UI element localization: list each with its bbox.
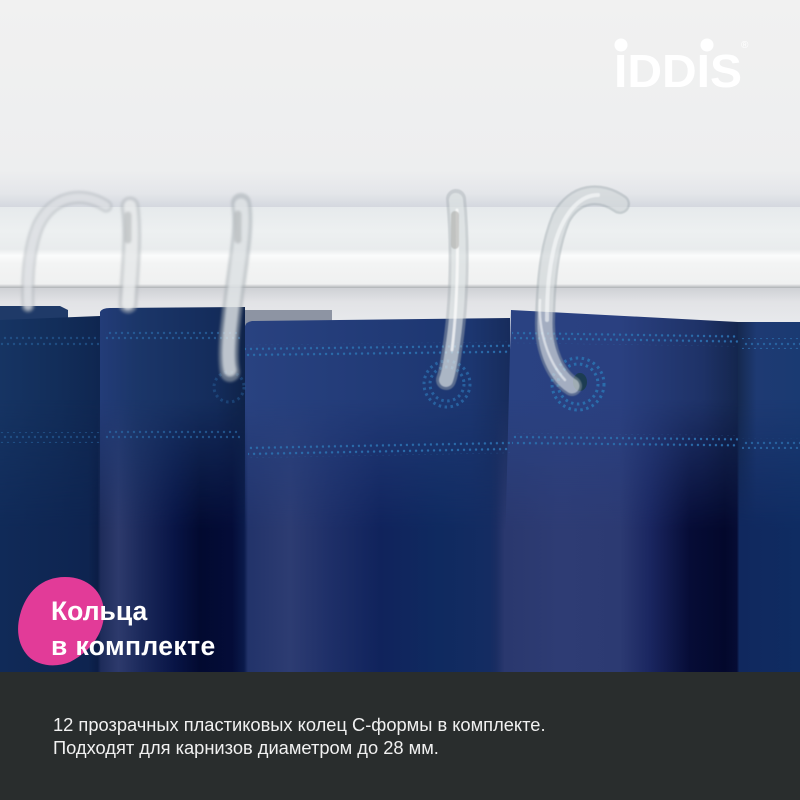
badge: pink blob <box>18 577 104 665</box>
logo: IDDIS: IDDIS <box>614 45 742 97</box>
curtain rod <box>0 207 800 328</box>
background wall <box>0 0 800 208</box>
ring 4 <box>446 199 459 380</box>
ring 1 <box>28 197 106 306</box>
back fold <box>0 306 68 322</box>
ring 2 <box>128 206 132 304</box>
bottom band <box>0 672 800 800</box>
grommet dots <box>214 358 604 410</box>
description text: Подходят для карнизов диаметром до 28 мм. <box>53 737 439 758</box>
stitching rows <box>0 331 800 458</box>
ring 5 <box>540 195 620 386</box>
lower fold shading <box>0 400 800 672</box>
description text: 12 прозрачных пластиковых колец С-формы в комплекте. <box>53 714 546 735</box>
curtain <box>0 306 800 672</box>
badge heading: в комплекте <box>51 631 216 661</box>
grommet hole <box>573 373 587 391</box>
logo: IDDIS: ® <box>741 40 749 51</box>
badge heading: Кольца <box>51 596 147 626</box>
rings <box>28 195 620 386</box>
ring 3 <box>229 203 242 372</box>
